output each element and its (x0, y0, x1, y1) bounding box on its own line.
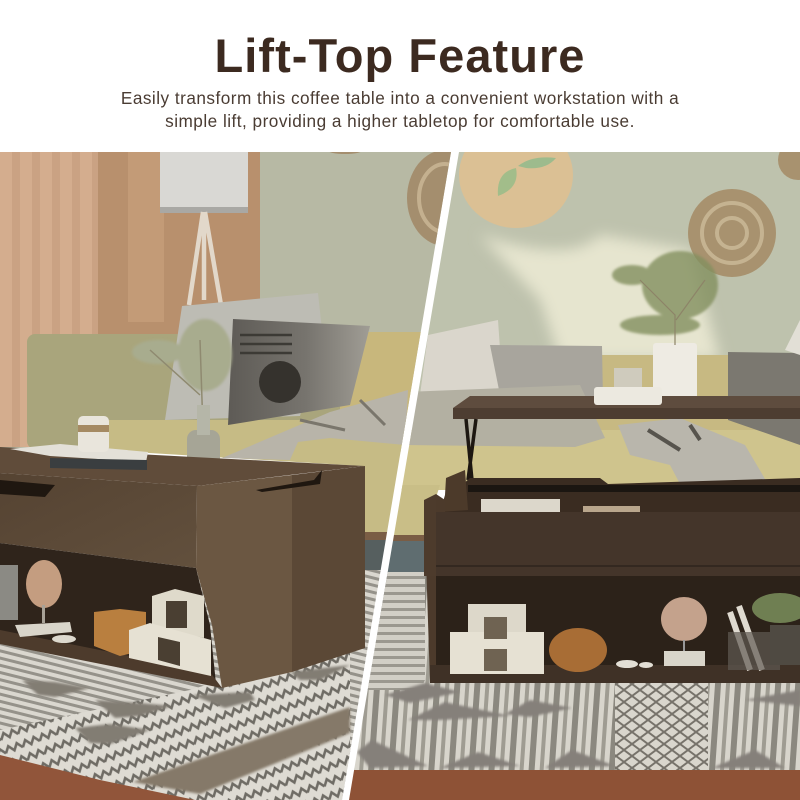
floor (0, 755, 195, 800)
rug shapes (357, 683, 800, 768)
coffee table closed (0, 447, 365, 688)
title: Lift-Top Feature (214, 29, 586, 82)
floor lamp (160, 152, 248, 305)
subtitle text: simple lift, providing a higher tabletop for comfortable use. (165, 111, 635, 131)
books and candle (10, 416, 148, 470)
rug (340, 572, 800, 770)
lift mechanism (466, 419, 476, 480)
plant and vase (612, 251, 718, 401)
cushions and throw (405, 320, 800, 484)
wall decorations (459, 152, 800, 277)
cushions and throw (165, 293, 408, 460)
wall and wood panels (0, 152, 460, 452)
sofa (380, 355, 800, 573)
rug (0, 570, 380, 800)
subtitle text (121, 88, 679, 131)
sofa (27, 332, 440, 572)
left photo: closed table (0, 146, 483, 800)
floor (340, 770, 800, 800)
wall decoration: rope disc (330, 152, 451, 244)
coffee table open (424, 470, 800, 683)
objects on shelf (450, 593, 800, 674)
plant and vase (132, 319, 232, 470)
subtitle text: Easily transform this coffee table into a convenient workstation with a (121, 88, 679, 108)
rug spots (22, 665, 350, 794)
right photo: raised table (340, 122, 800, 800)
shell and boxes on shelf (0, 560, 211, 676)
wall (380, 152, 800, 392)
raised tabletop (453, 368, 800, 419)
